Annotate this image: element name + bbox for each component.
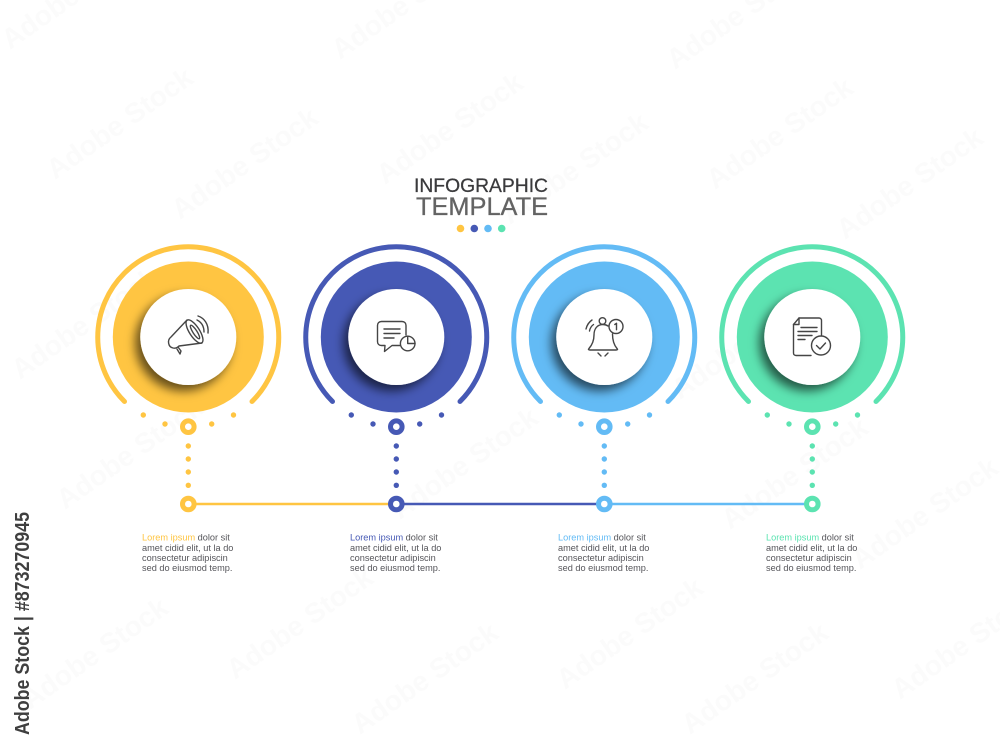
watermark pattern: Adobe Stock	[666, 281, 824, 405]
watermark pattern: Adobe Stock	[16, 591, 174, 715]
dots	[349, 412, 444, 488]
text block: Lorem ipsum	[766, 532, 819, 542]
watermark pattern: Adobe Stock	[676, 616, 834, 740]
filled disc	[737, 262, 888, 412]
dots	[765, 412, 860, 488]
step 1: yellow	[98, 247, 279, 573]
ring node top	[806, 421, 818, 433]
watermark pattern: Adobe Stock	[386, 401, 544, 525]
timeline connector	[188, 503, 812, 505]
text block: amet cidid elit, ut la do	[350, 543, 441, 553]
filled disc	[321, 262, 472, 412]
icon: bell with badge	[586, 318, 623, 356]
outer arc	[306, 247, 487, 402]
watermark pattern: Adobe Stock	[371, 66, 529, 190]
white circle	[764, 289, 860, 385]
title	[414, 175, 548, 221]
watermark pattern: Adobe Stock	[221, 561, 379, 685]
title: INFOGRAPHIC	[414, 175, 548, 197]
watermark pattern: Adobe Stock	[716, 411, 874, 535]
text block: dolor sit	[822, 532, 854, 542]
white circle	[556, 289, 652, 385]
step 2: dark blue	[306, 247, 487, 573]
ring node top	[182, 421, 194, 433]
ring node timeline	[598, 498, 610, 510]
text block: dolor sit	[406, 532, 438, 542]
icon: document with check	[794, 318, 830, 356]
ring node timeline	[182, 498, 194, 510]
watermark pattern: Adobe Stock	[166, 101, 324, 225]
ring node timeline	[806, 498, 818, 510]
filled disc	[529, 262, 680, 412]
text block: sed do eiusmod temp.	[558, 563, 648, 573]
text block: dolor sit	[198, 532, 230, 542]
text block: amet cidid elit, ut la do	[766, 543, 857, 553]
text block: sed do eiusmod temp.	[350, 563, 440, 573]
watermark pattern: Adobe Stock	[6, 261, 164, 385]
white circle	[348, 289, 444, 385]
watermark pattern: Adobe Stock	[496, 106, 654, 230]
watermark pattern: Adobe Stock	[551, 571, 709, 695]
watermark pattern: Adobe Stock	[831, 121, 989, 245]
outer arc	[722, 247, 903, 402]
text block: consectetur adipiscin	[350, 553, 436, 563]
ring node top	[598, 421, 610, 433]
icon: chat bubble with pie	[378, 322, 415, 352]
step 4: green	[722, 247, 903, 573]
text block: Lorem ipsum	[350, 532, 403, 542]
filled disc	[113, 262, 264, 412]
text block: amet cidid elit, ut la do	[558, 543, 649, 553]
step 3: light blue	[514, 247, 695, 573]
watermark pattern: Adobe Stock	[51, 391, 209, 515]
outer arc	[514, 247, 695, 402]
text block: sed do eiusmod temp.	[142, 563, 232, 573]
text block: amet cidid elit, ut la do	[142, 543, 233, 553]
watermark pattern: Adobe Stock	[41, 61, 199, 185]
text block: sed do eiusmod temp.	[766, 563, 856, 573]
ring node top	[390, 421, 402, 433]
stock id side label: Adobe Stock | #873270945	[12, 512, 34, 735]
dots	[141, 412, 236, 488]
text block: Lorem ipsum	[142, 532, 195, 542]
title: TEMPLATE	[416, 194, 548, 221]
watermark pattern: Adobe Stock	[346, 616, 504, 740]
text block: consectetur adipiscin	[766, 553, 852, 563]
text block: dolor sit	[614, 532, 646, 542]
text block: consectetur adipiscin	[558, 553, 644, 563]
text block: Lorem ipsum	[558, 532, 611, 542]
icon: megaphone	[169, 316, 208, 354]
watermark pattern: Adobe Stock	[846, 451, 1000, 575]
white circle	[140, 289, 236, 385]
watermark pattern: Adobe Stock	[701, 71, 859, 195]
ring node timeline	[390, 498, 402, 510]
text block: consectetur adipiscin	[142, 553, 228, 563]
dots	[557, 412, 652, 488]
outer arc	[98, 247, 279, 402]
title colour dots	[457, 225, 506, 232]
